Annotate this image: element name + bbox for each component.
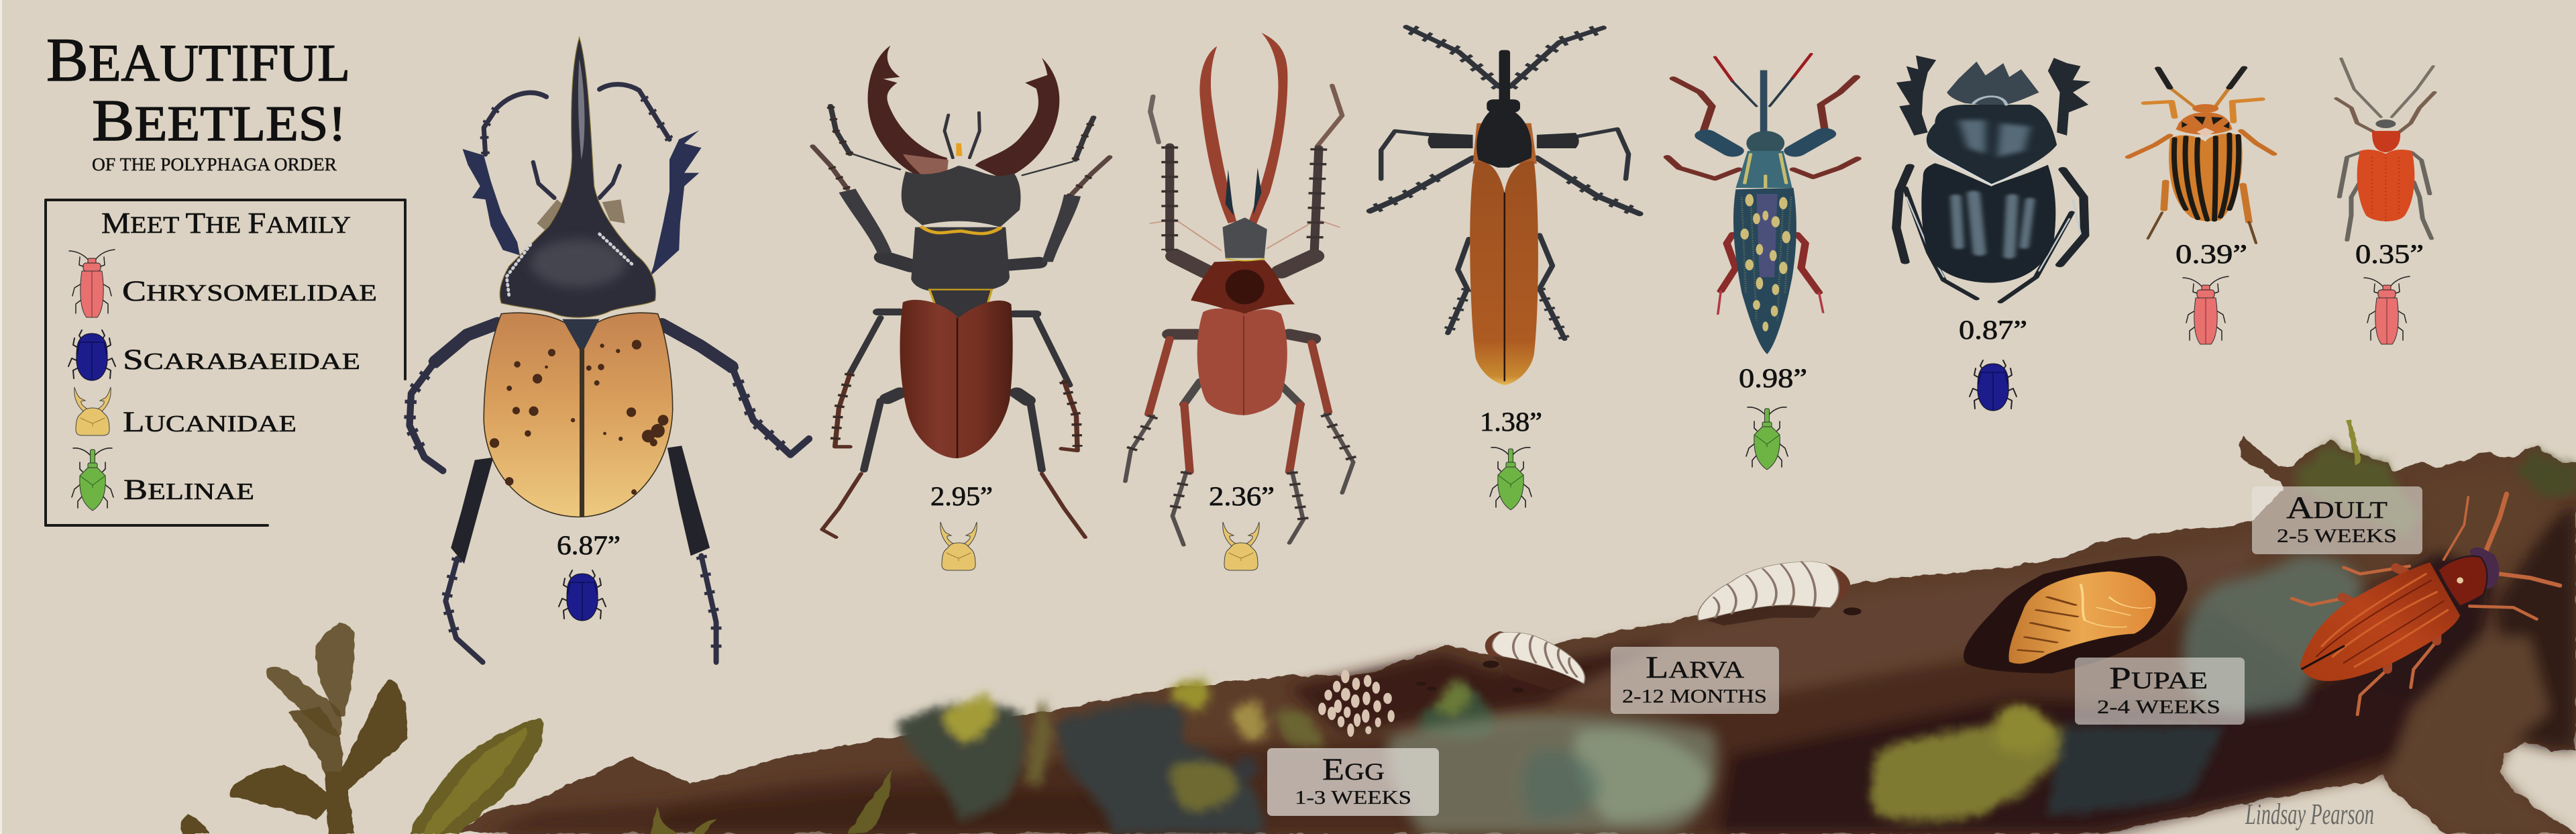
panel: meet the family legend [46,200,405,525]
title [46,25,350,154]
lichen clouds [1387,556,2362,834]
family icon: scarabaeidae [1970,360,2017,411]
pupa in burrow [1964,556,2188,673]
larva: upper [1698,562,1850,625]
beetle: net-winged long body [1370,27,1640,385]
log branch [460,419,2576,834]
legend row: Belinae: BELINAE [123,474,254,506]
beetle: weevil [1667,54,1858,354]
bark shading [483,470,2576,834]
family icon: belinae [1490,448,1532,510]
legend row: Scarabaeidae: SCARABAEIDAE [123,344,360,376]
size label: 0.39: 0.39” [2176,239,2247,269]
beetle: hercules [409,37,809,662]
size label: 6.87: 6.87” [557,530,621,560]
label: larva stage [1611,647,1779,714]
size label: 1.38: 1.38” [1480,407,1542,437]
label: pupae stage: 2-4 WEEKS [2097,696,2220,718]
decorative leaves in front of log [651,769,892,834]
family icon: scarabaeidae [559,570,606,621]
family icon: chrysomelidae [2364,276,2410,344]
egg cluster [1318,670,1395,737]
size label: 2.95: 2.95” [930,481,993,511]
label: egg stage: 1-3 WEEKS [1295,787,1411,809]
beetle: stag with curved mandibles [813,46,1110,537]
larva: lower [1485,631,1585,690]
beetle: dung beetle [1896,56,2091,302]
moss patches [896,419,2576,834]
beetle: stag with long mandibles [1125,33,1353,545]
family icon: chrysomelidae [2183,276,2229,344]
beetle: striped leaf beetle [2128,68,2274,244]
label: egg stage [1267,748,1439,816]
legend heading: MEET THE FAMILY [101,207,351,240]
label: adult stage: 2-5 WEEKS [2277,525,2397,547]
label: adult stage [2252,486,2422,554]
plant foliage, lower left [181,623,544,834]
label: egg stage: EGG [1322,752,1385,787]
label: pupae stage [2075,658,2245,725]
legend row: Lucanidae: LUCANIDAE [123,407,297,438]
burrow holes [1416,607,1862,692]
size label: 0.35: 0.35” [2355,239,2424,269]
adult beetle [2292,494,2560,715]
family icon: belinae [1746,407,1788,470]
legend row: Chrysomelidae: CHRYSOMELIDAE [122,276,377,307]
legend row: Belinae [72,448,254,511]
label: pupae stage: PUPAE [2109,661,2208,696]
beetle: red leaf beetle [2337,58,2434,240]
size label: 0.98: 0.98” [1739,363,1807,393]
label: adult stage: ADULT [2286,490,2387,525]
title: BEAUTIFUL [46,25,350,94]
family icon: lucanidae [941,522,977,570]
title: BEETLES! [92,89,346,154]
legend row: Chrysomelidae [69,250,377,317]
size label: 2.36: 2.36” [1209,481,1275,511]
label: larva stage: LARVA [1646,650,1744,685]
artist signature: Lindsay Pearson [2245,798,2374,831]
legend row: Lucanidae [74,387,297,438]
size label: 0.87: 0.87” [1959,315,2027,345]
label: larva stage: 2-12 MONTHS [1622,686,1767,707]
legend row: Scarabaeidae [68,330,360,380]
subtitle: OF THE POLYPHAGA ORDER [92,154,337,174]
family icon: lucanidae [1223,522,1259,570]
